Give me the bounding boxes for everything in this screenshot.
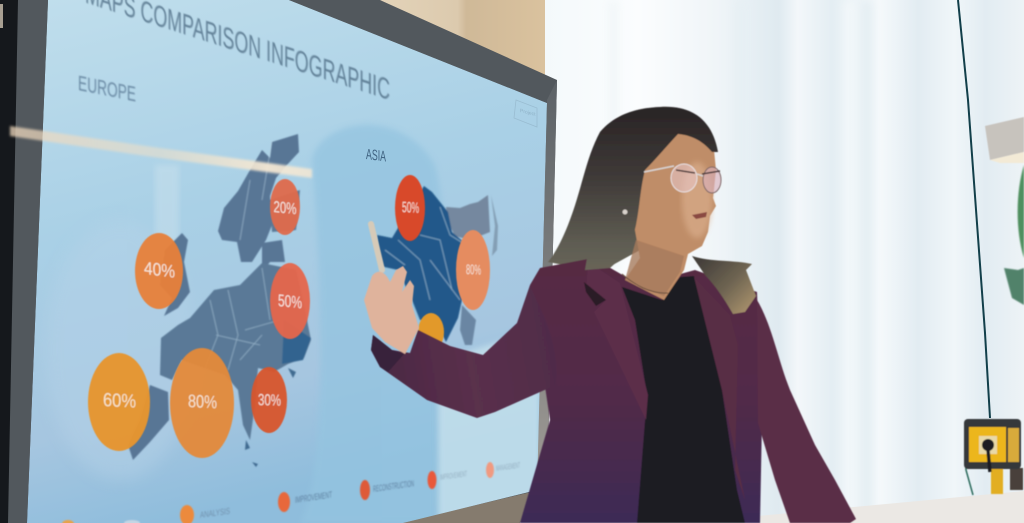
power socket <box>964 419 1023 495</box>
legend item: analysis <box>180 505 230 523</box>
legend item: improvement <box>278 489 332 512</box>
face highlight <box>682 162 712 238</box>
bubble 20% <box>270 179 300 235</box>
Black sea coast <box>282 332 312 364</box>
bubble 60% <box>88 353 150 451</box>
bubble 40%: 40% <box>144 258 175 282</box>
logo box: Project <box>520 108 536 118</box>
plant <box>1004 165 1024 305</box>
hair behind shoulders <box>548 107 690 272</box>
hand <box>364 266 419 354</box>
bubble 40% <box>135 233 183 309</box>
sleeve cuff <box>371 335 404 372</box>
heading: Europe: EUROPE <box>78 72 136 107</box>
screen background <box>27 0 547 523</box>
Iberia <box>128 385 169 460</box>
bubble orange, partly hidden <box>418 312 445 342</box>
sleeve: pointing arm <box>371 285 557 418</box>
Baltic and Finland <box>270 190 300 232</box>
bubble 80% <box>170 348 234 458</box>
borders <box>209 142 274 370</box>
plug <box>982 439 994 451</box>
legend: RECONSTRUCTION <box>373 478 414 494</box>
legend item: management <box>486 461 520 478</box>
reflection: pale lower left <box>84 425 168 476</box>
table edge <box>758 491 1024 523</box>
legend item: analysis: ANALYSIS <box>200 506 230 520</box>
right lapel <box>694 277 745 500</box>
heading: Asia: ASIA <box>366 146 386 165</box>
data bubbles: Europe <box>88 179 310 458</box>
neck shadow <box>625 240 684 296</box>
jacket: torso <box>520 258 762 523</box>
legend item: cut-off dots <box>62 520 140 523</box>
Japan <box>491 195 498 256</box>
Continent <box>160 263 311 440</box>
mouth <box>692 212 707 219</box>
bubble 50%: 50% <box>278 291 302 312</box>
lamp <box>985 117 1024 163</box>
bubble 30%: 30% <box>258 392 281 410</box>
bubble 60%: 60% <box>103 390 136 413</box>
glasses <box>644 164 721 193</box>
bubble 80%: 80% <box>188 391 217 412</box>
socket cords <box>965 445 973 495</box>
bubble 30% <box>251 367 287 433</box>
earring <box>622 210 628 214</box>
curtain background <box>540 0 1024 523</box>
sleeve: right arm <box>757 300 856 523</box>
Crete and islands <box>245 368 296 467</box>
bubble 50% <box>395 175 425 241</box>
wall panel above screen <box>370 0 545 80</box>
north-east Asia <box>446 195 490 240</box>
data bubbles: Asia <box>395 175 490 351</box>
necklace <box>622 274 668 293</box>
reflection: pale lower right <box>438 330 540 520</box>
central and south Asia <box>377 186 470 342</box>
cable <box>958 0 990 418</box>
legend: IMPROVEMENT <box>440 469 467 482</box>
hair top <box>585 107 718 270</box>
neck and face <box>625 130 716 300</box>
bubble 20%: 20% <box>274 198 296 218</box>
legend item: improvement: IMPROVEMENT <box>295 489 332 505</box>
presenter <box>364 107 856 523</box>
legend item: reconstruction <box>360 478 414 500</box>
curtain folds <box>610 0 872 523</box>
Britain <box>160 233 190 316</box>
socket stem <box>991 466 1003 494</box>
black top <box>622 276 745 523</box>
lapel notch shadow <box>584 282 606 306</box>
pen <box>371 224 382 270</box>
socket plate <box>979 436 997 454</box>
screen content <box>27 0 547 523</box>
socket body <box>964 419 1021 469</box>
left lapel <box>586 262 648 420</box>
Scandinavia <box>218 134 299 262</box>
bubble 50% <box>270 263 310 339</box>
reflection: warm light streak <box>10 126 312 178</box>
map: Asia <box>377 186 498 345</box>
bubble 50%: 50% <box>402 199 419 217</box>
reflection: silhouette on the screen <box>312 124 441 523</box>
bubble 80% <box>456 230 490 310</box>
borders <box>385 207 466 300</box>
hair falling on right shoulder <box>692 256 756 314</box>
legend item: improvement 2 <box>428 469 467 489</box>
logo box <box>514 100 537 127</box>
legend <box>62 461 520 523</box>
screen bezel <box>0 0 557 523</box>
south-east Asia <box>460 305 476 345</box>
bubble 80%: 80% <box>466 261 481 278</box>
screen content: MANAGEMENT <box>496 461 520 473</box>
map: Europe <box>128 134 311 467</box>
socket face <box>969 427 1006 462</box>
reflection: pale column <box>155 166 179 240</box>
